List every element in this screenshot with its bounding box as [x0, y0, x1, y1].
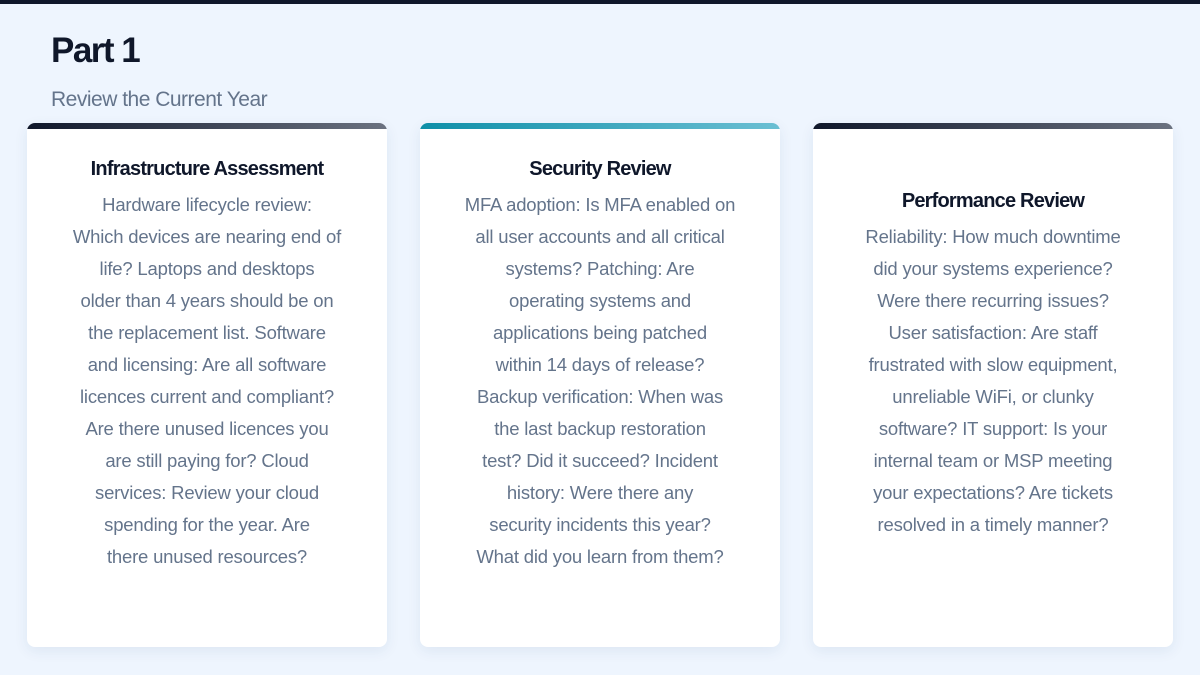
text block: infrastructure: Infrastructure Assessment: [91, 158, 323, 180]
panel: performance review: [813, 123, 1173, 647]
text block: infrastructure: there unused resources?: [107, 546, 307, 567]
text block: infrastructure: life? Laptops and desktops: [100, 258, 314, 279]
text block: security: systems? Patching: Are: [506, 258, 694, 279]
text block: infrastructure: the replacement list. Software: [88, 322, 326, 343]
title: Part 1: [51, 31, 139, 70]
text block: security: the last backup restoration: [494, 418, 706, 439]
text block: performance: did your systems experience?: [873, 258, 1113, 279]
text block: performance: resolved in a timely manner?: [878, 514, 1108, 535]
text block: security: security incidents this year?: [489, 514, 711, 535]
text block: security: [465, 158, 735, 567]
text block: infrastructure: older than 4 years should be on: [80, 290, 333, 311]
text block: infrastructure: Are there unused licences you: [85, 418, 329, 439]
text block: performance: your expectations? Are tickets: [873, 482, 1113, 503]
text block: infrastructure: [73, 158, 342, 567]
text block: infrastructure: spending for the year. Are: [104, 514, 310, 535]
text block: security: MFA adoption: Is MFA enabled on: [465, 194, 735, 215]
text block: performance: frustrated with slow equipment,: [869, 354, 1117, 375]
text block: security: Security Review: [529, 158, 671, 180]
text block: infrastructure: are still paying for? Cloud: [105, 450, 309, 471]
text block: security: What did you learn from them?: [476, 546, 724, 567]
text block: infrastructure: Which devices are nearing end of: [73, 226, 341, 247]
text block: security: all user accounts and all critical: [475, 226, 725, 247]
text block: performance: Performance Review: [902, 190, 1084, 212]
text block: performance: unreliable WiFi, or clunky: [892, 386, 1094, 407]
text block: infrastructure: and licensing: Are all software: [88, 354, 326, 375]
text block: security: Backup verification: When was: [477, 386, 723, 407]
text block: infrastructure: services: Review your cloud: [95, 482, 319, 503]
text block: security: operating systems and: [509, 290, 691, 311]
text block: performance: User satisfaction: Are staff: [889, 322, 1097, 343]
text block: performance: Were there recurring issues?: [877, 290, 1109, 311]
subtitle: Review the Current Year: [51, 88, 267, 111]
text block: performance: [865, 190, 1121, 535]
text block: performance: software? IT support: Is your: [879, 418, 1107, 439]
text block: security: within 14 days of release?: [496, 354, 704, 375]
text block: performance: Reliability: How much downtime: [865, 226, 1121, 247]
text block: security: history: Were there any: [507, 482, 693, 503]
text block: infrastructure: licences current and compliant?: [80, 386, 334, 407]
text block: infrastructure: Hardware lifecycle review:: [102, 194, 312, 215]
text block: security: applications being patched: [493, 322, 707, 343]
panel: security review: [420, 123, 780, 647]
text block: performance: internal team or MSP meeting: [874, 450, 1112, 471]
panel: infrastructure assessment: [27, 123, 387, 647]
text block: security: test? Did it succeed? Incident: [482, 450, 718, 471]
